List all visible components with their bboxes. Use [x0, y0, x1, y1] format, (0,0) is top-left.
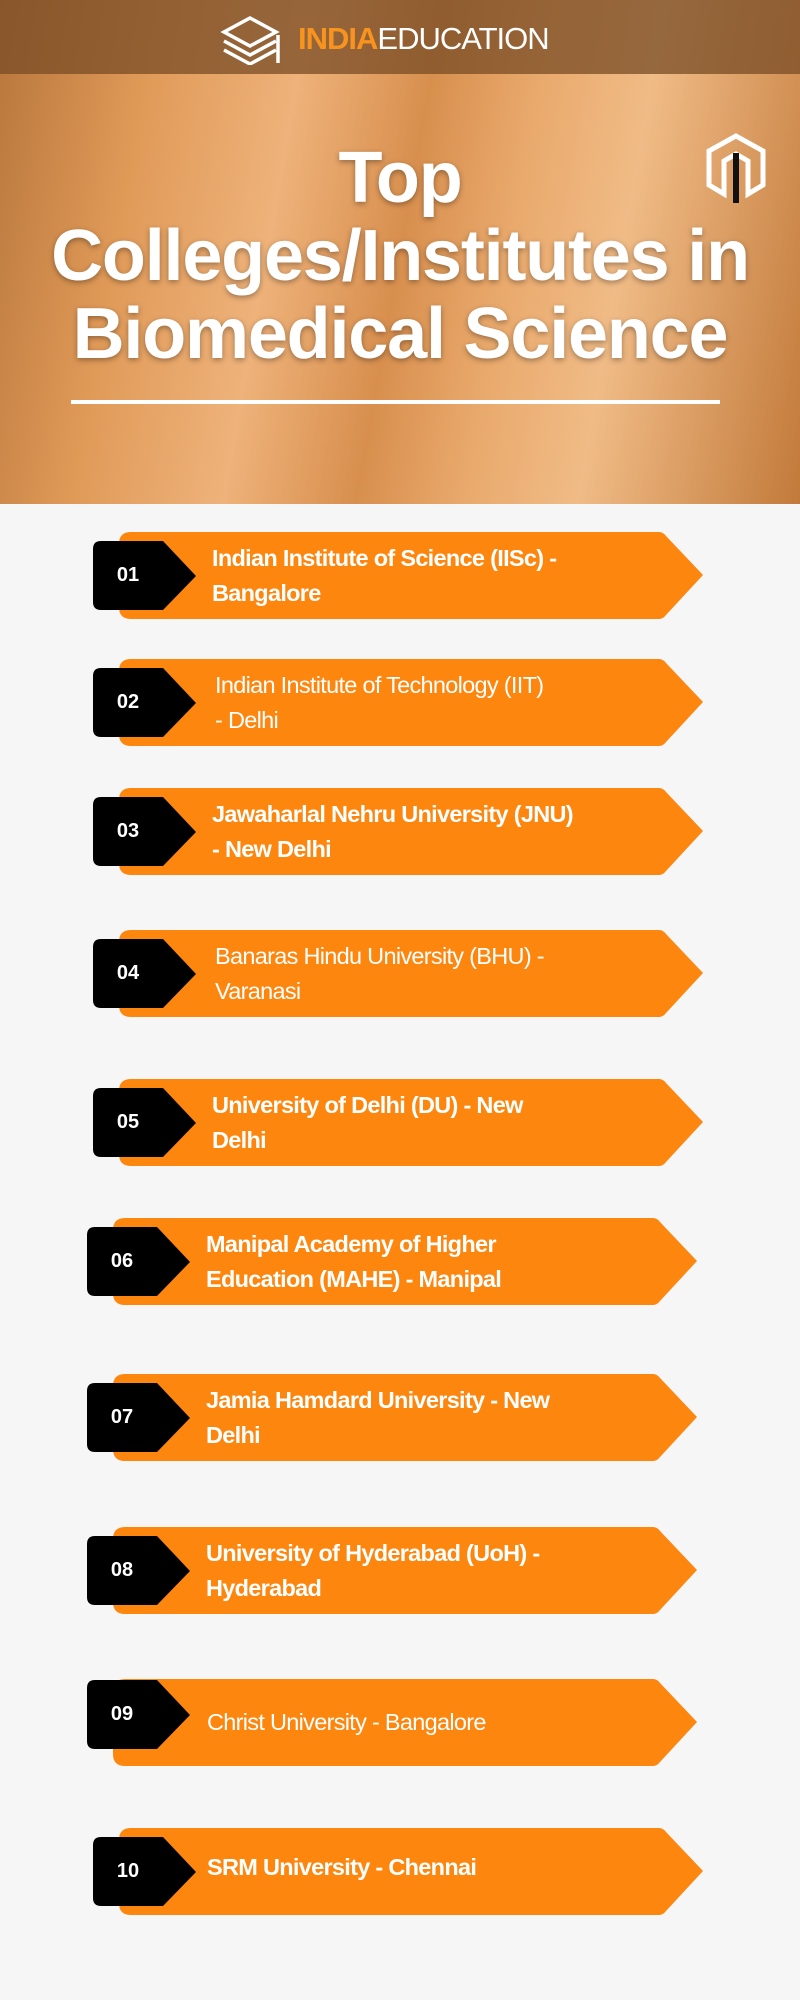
item 05: 05	[117, 1111, 139, 1133]
item 06: Education (MAHE) - Manipal	[206, 1266, 501, 1292]
item 04	[93, 930, 703, 1017]
item 09: 09	[111, 1703, 133, 1725]
item 08: 08	[111, 1559, 133, 1581]
item 07: Jamia Hamdard University - New	[206, 1386, 549, 1412]
item 03: 03	[117, 820, 139, 842]
item 10: 10	[117, 1860, 139, 1882]
hero background	[0, 0, 800, 504]
item 09: Christ University - Bangalore	[207, 1709, 486, 1735]
item 04: Varanasi	[215, 978, 300, 1004]
item 03: Jawaharlal Nehru University (JNU)	[212, 800, 573, 826]
title	[50, 138, 749, 374]
brand text: INDIAEDUCATION	[298, 21, 549, 56]
icon: hexagon logo	[706, 133, 766, 203]
item 04: Banaras Hindu University (BHU) -	[215, 942, 544, 968]
item 02: Indian Institute of Technology (IIT)	[215, 672, 543, 698]
icon: stacked books	[220, 16, 280, 65]
item 01: Bangalore	[212, 580, 321, 606]
title: Colleges/Institutes in	[51, 216, 749, 296]
item 01: 01	[117, 564, 139, 586]
item 03: - New Delhi	[212, 836, 331, 862]
item 03	[93, 788, 703, 875]
item 09	[87, 1679, 697, 1766]
header bar	[0, 0, 800, 74]
item 06: Manipal Academy of Higher	[206, 1230, 496, 1256]
item 02: - Delhi	[215, 706, 278, 732]
title: Top	[338, 138, 462, 218]
item 07: 07	[111, 1406, 133, 1428]
item 05: University of Delhi (DU) - New	[212, 1092, 523, 1118]
item 01: Indian Institute of Science (IISc) -	[212, 544, 556, 570]
item 01	[93, 532, 703, 619]
item 07: Delhi	[206, 1422, 260, 1448]
logo	[220, 16, 549, 65]
item 02: 02	[117, 691, 139, 713]
item 08: University of Hyderabad (UoH) -	[206, 1540, 539, 1566]
item 08: Hyderabad	[206, 1574, 321, 1600]
item 08	[87, 1527, 697, 1614]
title underline	[71, 400, 720, 404]
item 06	[87, 1218, 697, 1305]
item 05	[93, 1079, 703, 1166]
item 06: 06	[111, 1250, 133, 1272]
item 07	[87, 1374, 697, 1461]
item 10: SRM University - Chennai	[207, 1854, 476, 1880]
item 04: 04	[117, 962, 139, 984]
item 05: Delhi	[212, 1126, 266, 1152]
title: Biomedical Science	[73, 294, 727, 374]
item 10	[93, 1828, 703, 1915]
item 02	[93, 659, 703, 746]
